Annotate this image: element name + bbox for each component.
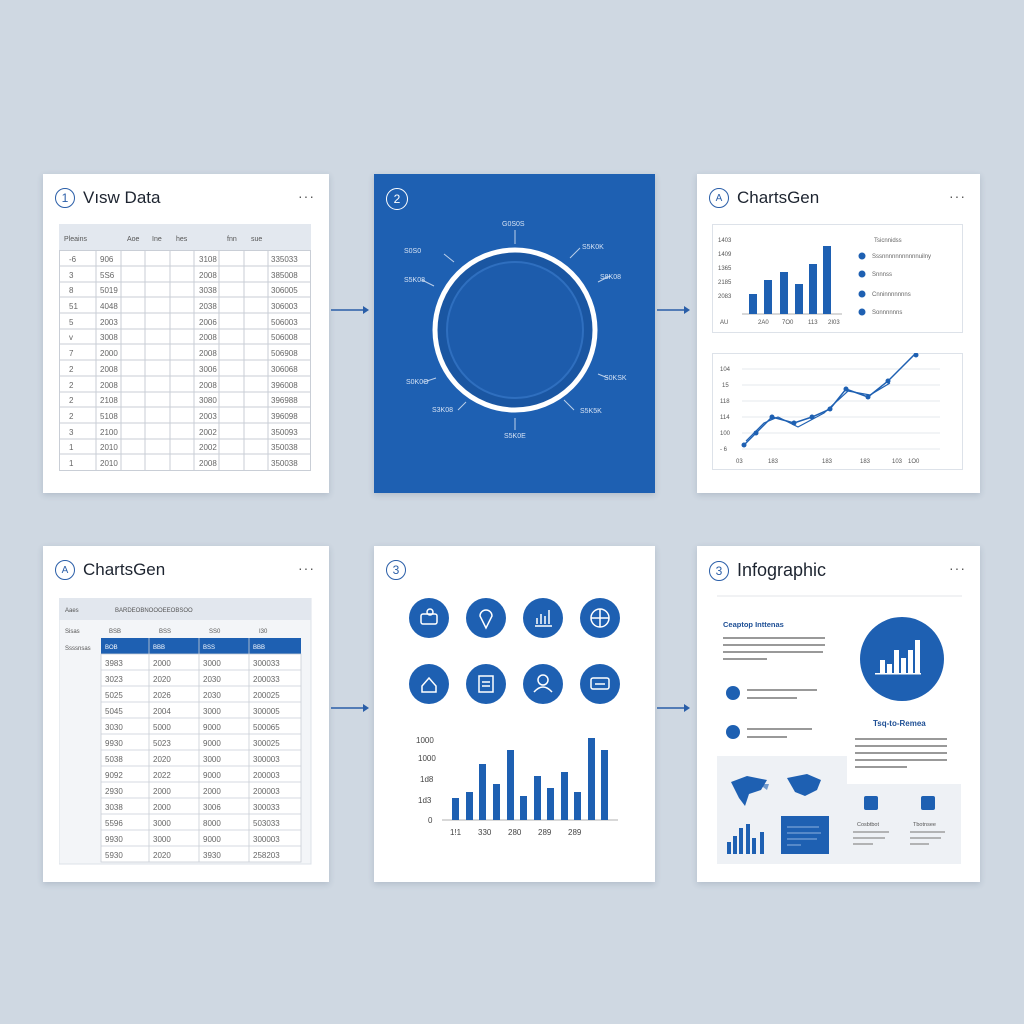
data table: 2000 <box>100 349 118 358</box>
ring diagram: S5K0E <box>504 433 526 440</box>
styled table: 3030 <box>105 723 123 732</box>
ring diagram <box>404 221 627 440</box>
styled table: 9000 <box>203 739 221 748</box>
data table: 350038 <box>271 459 298 468</box>
styled table: 2020 <box>153 851 171 860</box>
styled table: 258203 <box>253 851 280 860</box>
card 6: infographic: Tbotnsee <box>913 822 936 828</box>
data table: 2100 <box>100 428 118 437</box>
styled table: 9000 <box>203 723 221 732</box>
styled table: 9000 <box>203 835 221 844</box>
data table: 3038 <box>199 286 217 295</box>
data table: 2008 <box>199 381 217 390</box>
bar chart <box>416 736 582 837</box>
line chart: 183 <box>768 459 779 465</box>
data table: 396098 <box>271 412 298 421</box>
heading: 1 <box>62 191 68 205</box>
styled table: 2030 <box>203 675 221 684</box>
styled table: 9930 <box>105 835 123 844</box>
line chart: 03 <box>736 459 743 465</box>
data table: 3108 <box>199 255 217 264</box>
data table: 385008 <box>271 271 298 280</box>
line chart: 183 <box>822 459 833 465</box>
data table: 5 <box>69 318 74 327</box>
ring diagram: S5K08 <box>404 277 425 284</box>
data table: 3008 <box>100 333 118 342</box>
data table: 8 <box>69 286 74 295</box>
bar chart with legend: 1403 <box>718 238 732 244</box>
data table: 5108 <box>100 412 118 421</box>
data table: 51 <box>69 302 78 311</box>
styled table: 200033 <box>253 675 280 684</box>
data table: 396008 <box>271 381 298 390</box>
data table: 3 <box>69 428 74 437</box>
data table: 2 <box>69 412 74 421</box>
data table: 1 <box>69 459 74 468</box>
styled table: 2004 <box>153 707 171 716</box>
data table: 2002 <box>199 428 217 437</box>
data table: sue <box>251 236 262 243</box>
card 2: processing ring <box>374 174 655 493</box>
line chart: 15 <box>722 383 729 389</box>
styled table: 5025 <box>105 691 123 700</box>
data table: 2003 <box>199 412 217 421</box>
heading: Infographic <box>737 560 826 580</box>
heading: ChartsGen <box>737 188 819 207</box>
data table: 2002 <box>199 443 217 452</box>
styled table: 3930 <box>203 851 221 860</box>
styled table: 5596 <box>105 819 123 828</box>
card 1: view data <box>43 174 329 493</box>
bar chart with legend <box>712 224 963 333</box>
heading: Vısw Data <box>83 188 160 207</box>
bottom dashboard panel <box>717 756 961 864</box>
styled table: 200025 <box>253 691 280 700</box>
data table: 5S6 <box>100 271 115 280</box>
data table: 3006 <box>199 365 217 374</box>
arrow 3 <box>331 704 369 712</box>
data table: hes <box>176 236 188 243</box>
line chart: 118 <box>720 399 730 405</box>
styled table: 9930 <box>105 739 123 748</box>
step number <box>386 188 408 210</box>
styled table: 200003 <box>253 771 280 780</box>
bar chart: 330 <box>478 828 492 837</box>
styled table: 2030 <box>203 691 221 700</box>
line chart: - 6 <box>720 447 728 453</box>
bar chart with legend: 2185 <box>718 280 732 286</box>
bar chart: 1000 <box>418 754 436 763</box>
data table: 3080 <box>199 396 217 405</box>
styled table: 5000 <box>153 723 171 732</box>
styled table: 2020 <box>153 675 171 684</box>
styled table: 3000 <box>203 707 221 716</box>
data table: 335033 <box>271 255 298 264</box>
card 6: infographic <box>697 546 980 882</box>
styled table: 2000 <box>153 787 171 796</box>
data table: 2008 <box>199 333 217 342</box>
ring diagram: S3K08 <box>432 407 453 414</box>
styled table: 500065 <box>253 723 280 732</box>
data table: 906 <box>100 255 114 264</box>
heading: ChartsGen <box>83 560 165 579</box>
bar chart: 289 <box>538 828 552 837</box>
bar chart with legend: Sonnnnnns <box>872 310 902 316</box>
data table: 2008 <box>199 271 217 280</box>
data table: 4048 <box>100 302 118 311</box>
styled table: I30 <box>259 629 268 635</box>
styled table: 503033 <box>253 819 280 828</box>
card 6: infographic: Cosbtbot <box>857 822 879 828</box>
data table: 506003 <box>271 318 298 327</box>
data table: 350038 <box>271 443 298 452</box>
data table: -6 <box>69 255 77 264</box>
data table: 3 <box>69 271 74 280</box>
styled table: 3023 <box>105 675 123 684</box>
styled table <box>59 598 312 864</box>
styled table: Aaes <box>65 608 79 614</box>
styled table: 2000 <box>153 659 171 668</box>
card 4: chartsgen table <box>43 546 329 882</box>
data table: v <box>69 333 73 342</box>
styled table: 3038 <box>105 803 123 812</box>
data table: 350093 <box>271 428 298 437</box>
bar chart with legend: 113 <box>808 320 818 326</box>
data table: 506008 <box>271 333 298 342</box>
styled table: BBB <box>253 645 265 651</box>
styled table: 300005 <box>253 707 280 716</box>
card 6: infographic: ··· <box>949 560 966 576</box>
styled table: 3983 <box>105 659 123 668</box>
data table: 396988 <box>271 396 298 405</box>
line chart: 114 <box>720 415 730 421</box>
heading: A <box>716 192 722 204</box>
card 4: chartsgen table: ··· <box>298 560 315 576</box>
bar chart: 1d3 <box>418 796 432 805</box>
styled table: 300025 <box>253 739 280 748</box>
data table: 1 <box>69 443 74 452</box>
styled table: 2000 <box>153 803 171 812</box>
data table: 306005 <box>271 286 298 295</box>
bar chart: 0 <box>428 816 433 825</box>
line chart: 183 <box>860 459 871 465</box>
data table: 306068 <box>271 365 298 374</box>
styled table: BSB <box>109 629 121 635</box>
bar chart with legend: 1409 <box>718 252 732 258</box>
arrow 1 <box>331 306 369 314</box>
bar chart: 1d8 <box>420 775 434 784</box>
styled table: 9092 <box>105 771 123 780</box>
styled table: 200003 <box>253 787 280 796</box>
bar chart: 1!1 <box>450 828 462 837</box>
styled table: 300033 <box>253 803 280 812</box>
data table: Pleains <box>64 236 87 243</box>
line chart: 1O0 <box>908 459 920 465</box>
data table: fnn <box>227 236 237 243</box>
styled table: 5930 <box>105 851 123 860</box>
data table: 2108 <box>100 396 118 405</box>
data table: 7 <box>69 349 74 358</box>
card 3: chartsgen charts <box>697 174 980 493</box>
bar chart with legend: Tsicnnidss <box>874 238 902 244</box>
card 3: chartsgen charts: ··· <box>949 188 966 204</box>
styled table: BBB <box>153 645 165 651</box>
arrow 4 <box>657 704 690 712</box>
styled table: 9000 <box>203 771 221 780</box>
data table: 2010 <box>100 459 118 468</box>
styled table: 2026 <box>153 691 171 700</box>
styled table: Sisas <box>65 629 80 635</box>
bar chart with legend: 2083 <box>718 294 732 300</box>
styled table: 3000 <box>203 755 221 764</box>
icon grid <box>409 598 620 837</box>
ring diagram: S5K0K <box>582 244 604 251</box>
bar chart with legend: 7O0 <box>782 320 794 326</box>
styled table: 2022 <box>153 771 171 780</box>
bar chart with legend: AU <box>720 320 728 326</box>
ring diagram: S5K5K <box>580 408 602 415</box>
text block: Ceaptop Inttenas <box>723 620 784 629</box>
data table: Aoe <box>127 236 140 243</box>
ring diagram: S0S0 <box>404 248 421 255</box>
data table: Ine <box>152 236 162 243</box>
styled table: 300003 <box>253 755 280 764</box>
data table: 2008 <box>199 349 217 358</box>
styled table: 5023 <box>153 739 171 748</box>
data table: 506908 <box>271 349 298 358</box>
card 5: icons and bar chart <box>374 546 655 882</box>
bar chart: 1000 <box>416 736 434 745</box>
line chart <box>712 353 963 470</box>
step number: 3 <box>393 563 399 577</box>
subheading text: Tsq-to-Remea <box>873 719 926 728</box>
heading: 3 <box>716 564 722 578</box>
data table <box>59 224 311 471</box>
bar chart with legend: 1365 <box>718 266 732 272</box>
line chart: 104 <box>720 367 731 373</box>
data table: 2 <box>69 396 74 405</box>
styled table: 5045 <box>105 707 123 716</box>
bar chart: 280 <box>508 828 522 837</box>
bar chart with legend: Sssnnnnnnnnnnnuilny <box>872 254 931 260</box>
ring diagram: S0KSK <box>604 375 627 382</box>
data table: 2 <box>69 381 74 390</box>
data table: 2038 <box>199 302 217 311</box>
bar chart: 289 <box>568 828 582 837</box>
bar chart with legend: Cnninnnnnnns <box>872 292 911 298</box>
bar chart with legend: 2I03 <box>828 320 840 326</box>
data table: 5019 <box>100 286 118 295</box>
card 1: view data: ··· <box>298 188 315 204</box>
data table: 2003 <box>100 318 118 327</box>
data table: 2010 <box>100 443 118 452</box>
data table: 2008 <box>100 381 118 390</box>
styled table: 2000 <box>203 787 221 796</box>
styled table: SS0 <box>209 629 221 635</box>
heading <box>55 188 160 208</box>
styled table: 3000 <box>153 819 171 828</box>
bar chart with legend: Snnnss <box>872 272 892 278</box>
bullet items <box>726 686 740 700</box>
line chart: 103 <box>892 459 903 465</box>
line chart: 100 <box>720 431 731 437</box>
styled table: BSS <box>203 645 215 651</box>
data table: 2008 <box>199 459 217 468</box>
ring diagram: G0S0S <box>502 221 525 228</box>
styled table: 2930 <box>105 787 123 796</box>
arrow 2 <box>657 306 690 314</box>
data table: 2 <box>69 365 74 374</box>
styled table: 2020 <box>153 755 171 764</box>
styled table: BOB <box>105 645 118 651</box>
styled table: BSS <box>159 629 171 635</box>
styled table: Ssssnsas <box>65 646 91 652</box>
data table: 306003 <box>271 302 298 311</box>
styled table: 300033 <box>253 659 280 668</box>
styled table: 300003 <box>253 835 280 844</box>
bar chart with legend: 2A0 <box>758 320 769 326</box>
big circle icon <box>860 617 944 701</box>
ring diagram: S0K0O <box>406 379 429 386</box>
styled table: 8000 <box>203 819 221 828</box>
small icons <box>864 796 878 810</box>
data table: 2008 <box>100 365 118 374</box>
styled table: 5038 <box>105 755 123 764</box>
styled table: 3000 <box>203 659 221 668</box>
data table: 2006 <box>199 318 217 327</box>
step number: 2 <box>394 192 400 206</box>
styled table: BARDEOBNOOOEEOBSOO <box>115 608 193 614</box>
styled table: 3000 <box>153 835 171 844</box>
heading: A <box>62 564 68 576</box>
styled table: 3006 <box>203 803 221 812</box>
ring diagram: S8K08 <box>600 274 621 281</box>
